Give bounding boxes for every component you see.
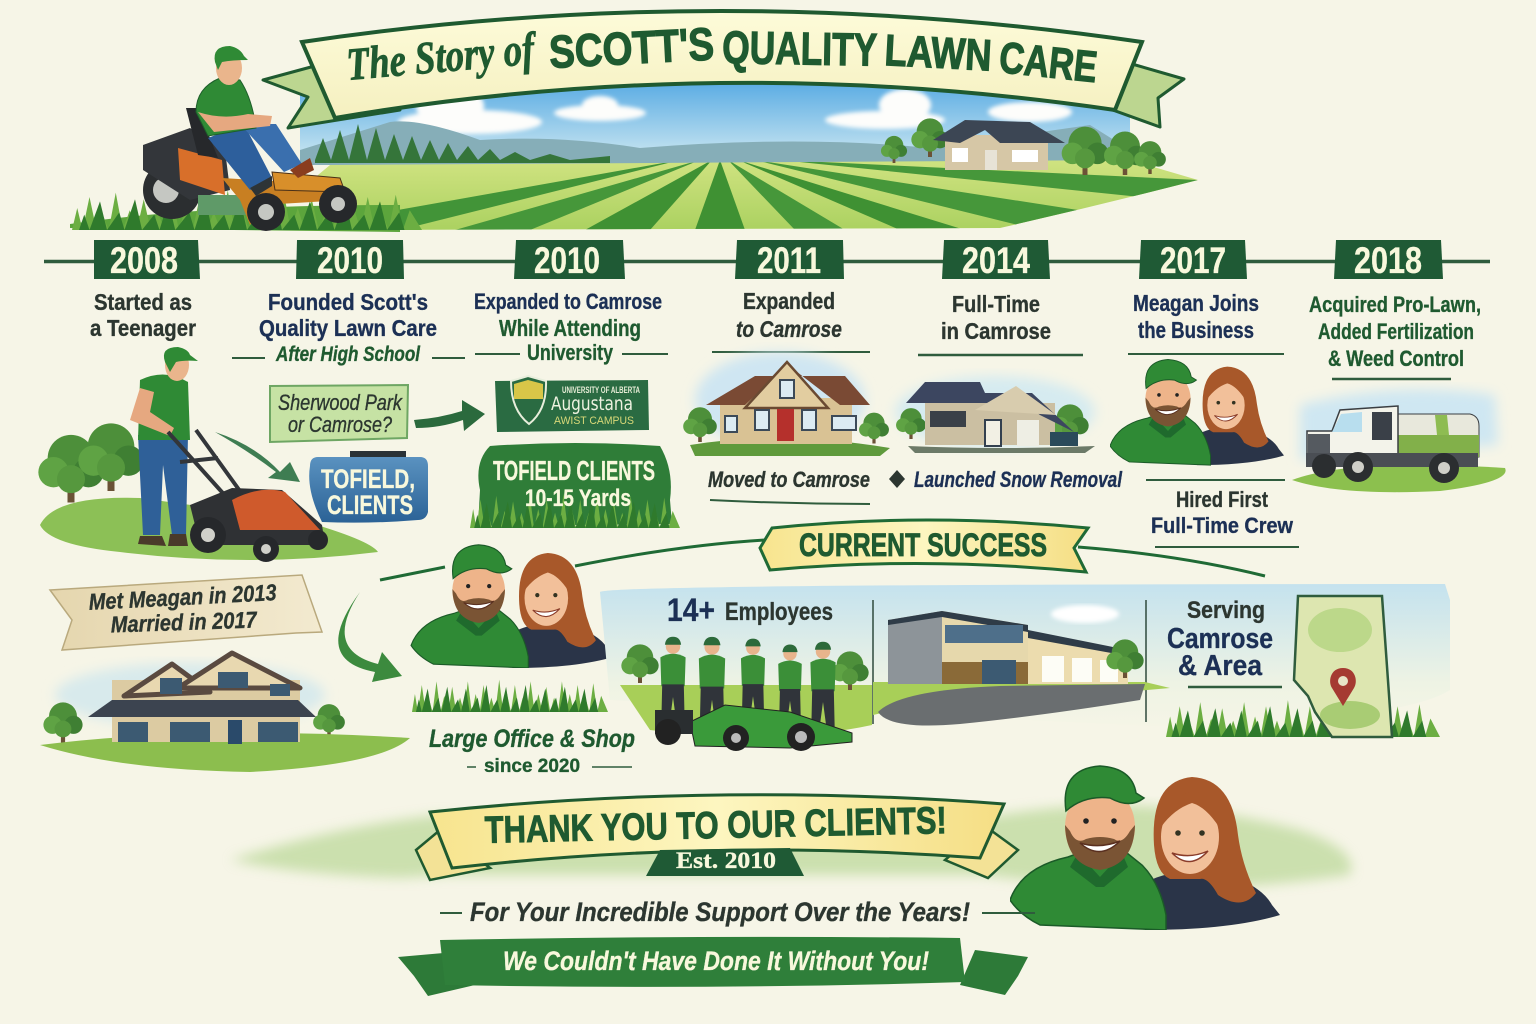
deck: [198, 195, 280, 215]
thank-you banner: THANK YOU TO OUR CLIENTS!: [484, 800, 947, 852]
left ribbon tail: [263, 64, 400, 128]
sign: Tofield clients: TOFIELD,: [321, 464, 415, 494]
callout: met Meagan: Married in 2017: [110, 606, 258, 638]
caption: hired first full-time crew: Full-Time Crew: [1151, 513, 1294, 538]
trees: [38, 423, 144, 502]
sign: Tofield clients 10-15 yards: TOFIELD CLIENTS: [493, 455, 655, 486]
callout: Sherwood Park or Camrose: [270, 385, 408, 442]
milestone: founded: Founded Scott's: [268, 289, 428, 315]
mower deck: [190, 488, 325, 545]
title words: LAWN: [883, 26, 993, 81]
mower wheels: [190, 517, 226, 553]
shield: [511, 376, 546, 424]
serving camrose text: Camrose: [1167, 623, 1273, 655]
milestone: founded: [232, 289, 465, 366]
title words: SCOTT'S: [548, 17, 715, 78]
est ribbon: [646, 848, 804, 876]
illustration: full-time house: [895, 376, 1095, 453]
caption: launched snow removal: Launched Snow Removal: [914, 467, 1123, 492]
house: [881, 118, 1166, 175]
rider: [208, 124, 272, 190]
callout: met Meagan: Met Meagan in 2013: [88, 579, 277, 615]
milestone: started as a teenager: [90, 289, 196, 341]
employees heading: [667, 592, 833, 628]
illustration: man on riding mower: [70, 46, 422, 232]
green mower: [655, 705, 852, 751]
callout: Sherwood Park or Camrose: or Camrose?: [288, 412, 393, 437]
curved arrow to couple: [338, 592, 402, 682]
road: [878, 684, 1145, 726]
rear wheel: [143, 161, 201, 219]
title words: CARE: [997, 33, 1100, 92]
timeline: [44, 240, 1490, 281]
right ribbon tail: [1085, 62, 1184, 127]
sign: Tofield clients: CLIENTS: [327, 490, 413, 520]
arrow: mower to Tofield: [215, 432, 300, 482]
year 2018: 2018: [1354, 240, 1422, 281]
milestone: started as a teenager: Started as: [94, 289, 192, 315]
milestone: founded: Quality Lawn Care: [259, 315, 437, 341]
sign: Augustana campus: [495, 376, 649, 432]
caption: moved to Camrose: [708, 467, 870, 504]
current success banner: CURRENT SUCCESS: [799, 527, 1047, 563]
divider: [873, 600, 1146, 724]
year 2017: 2017: [1160, 240, 1226, 281]
milestone: acquired Pro-Lawn: Acquired Pro-Lawn,: [1309, 292, 1481, 317]
Alberta map with pin: [1294, 596, 1392, 737]
thank-you message: For Your Incredible Support Over the Years!: [470, 897, 970, 927]
seat: [186, 108, 218, 158]
sign: Augustana campus: AWIST CAMPUS: [554, 415, 634, 427]
milestone: expanded while attending university: University: [527, 340, 614, 365]
serving camrose text: Serving: [1187, 597, 1265, 624]
crew: [660, 637, 836, 729]
sign: Augustana campus: UNIVERSITY OF ALBERTA: [562, 385, 640, 395]
mower handle: [168, 430, 250, 510]
band: [430, 795, 1004, 868]
serving camrose text: [1167, 597, 1282, 687]
illustration: spray truck: [1292, 389, 1506, 492]
grass: [1166, 700, 1440, 737]
bottom green banner: [398, 937, 1028, 996]
ground: [40, 498, 378, 560]
illustration: brown house: [683, 352, 890, 456]
trees: [621, 644, 659, 683]
callout: met Meagan: [50, 575, 322, 650]
ribbon tails: [416, 830, 490, 880]
sky: [300, 75, 1130, 165]
field stripes: [318, 160, 1198, 230]
cloud: [1051, 605, 1119, 623]
script lead-in: The Story of: [344, 22, 540, 90]
caption: hired first full-time crew: Hired First: [1176, 487, 1269, 512]
milestone: expanded while attending university: Expanded to Camrose: [474, 289, 662, 314]
milestone: full-time: in Camrose: [941, 318, 1051, 344]
sign: Tofield clients: [309, 451, 428, 523]
caption: moved to Camrose: Moved to Camrose: [708, 467, 870, 492]
bottom green banner: We Couldn't Have Done It Without You!: [503, 946, 929, 976]
arrow: to Augustana: [414, 400, 485, 431]
year 2010 founded: 2010: [317, 240, 383, 281]
illustration: man with push mower: [38, 347, 378, 562]
sign: Augustana campus: Augustana: [551, 393, 633, 415]
caption: large office and shop: since 2020: [484, 756, 580, 777]
milestone: expanded to Camrose: to Camrose: [736, 316, 842, 342]
est ribbon: Est. 2010: [676, 848, 776, 873]
grass strip: [412, 680, 608, 712]
main band: [302, 11, 1142, 118]
portrait: large couple: [1010, 766, 1280, 930]
title banner: [263, 11, 1184, 128]
serving camrose text: & Area: [1178, 650, 1263, 682]
current success banner: [380, 520, 1265, 580]
milestone: full-time: [918, 291, 1083, 355]
callout: Sherwood Park or Camrose: Sherwood Park: [278, 390, 403, 415]
tree line: [315, 124, 610, 163]
milestone: expanded to Camrose: [712, 288, 870, 352]
portrait: couple: [411, 545, 614, 668]
clouds: [398, 86, 1072, 134]
caption: large office and shop: [429, 725, 635, 777]
lawn behind building: [873, 682, 1170, 715]
employees heading: Employees: [725, 598, 833, 626]
lawn: [620, 685, 872, 736]
front wheels: [247, 193, 285, 231]
milestone: expanded while attending university: While Attending: [499, 315, 641, 341]
milestone: acquired Pro-Lawn: & Weed Control: [1328, 346, 1464, 371]
milestone: expanded while attending university: [474, 289, 668, 365]
year 2008: 2008: [110, 240, 178, 281]
milestone: Meagan joins: [1128, 290, 1284, 354]
thank-you banner: [416, 795, 1018, 880]
milestone: Meagan joins: Meagan Joins: [1133, 290, 1259, 316]
office and shop: [888, 611, 1144, 684]
header landscape: [300, 84, 1198, 230]
milestone: Meagan joins: the Business: [1138, 317, 1254, 343]
flourish lines: [380, 540, 1265, 580]
sign: Tofield clients 10-15 yards: [470, 443, 680, 528]
hills: [300, 121, 1130, 165]
sky: [600, 584, 1450, 726]
line: [44, 260, 1490, 263]
portrait: Meagan joins couple: [1110, 359, 1284, 465]
year 2014: 2014: [962, 240, 1030, 281]
milestone: full-time: Full-Time: [952, 291, 1040, 317]
caption: hired first full-time crew: [1146, 480, 1299, 547]
milestone: founded: After High School: [275, 343, 421, 366]
milestone: acquired Pro-Lawn: [1309, 292, 1481, 379]
panel: current success scene: [600, 584, 1450, 751]
caption: large office and shop: Large Office & Shop: [429, 725, 635, 753]
milestone: expanded to Camrose: Expanded: [743, 288, 835, 314]
year 2010 expanded: 2010: [534, 240, 600, 281]
milestone: acquired Pro-Lawn: Added Fertilization: [1318, 319, 1474, 344]
person: [138, 435, 188, 535]
green swash behind thank-you: [230, 805, 1351, 890]
sign: Tofield clients 10-15 yards: 10-15 Yards: [525, 485, 631, 512]
title words: [548, 17, 1100, 92]
employees heading: 14+: [667, 592, 715, 628]
illustration: family home: [40, 653, 410, 772]
mower body: [143, 128, 230, 200]
year 2011: 2011: [757, 240, 821, 281]
title words: QUALITY: [722, 21, 878, 76]
milestone: started as a teenager: a Teenager: [90, 315, 196, 341]
grass: [70, 205, 400, 232]
